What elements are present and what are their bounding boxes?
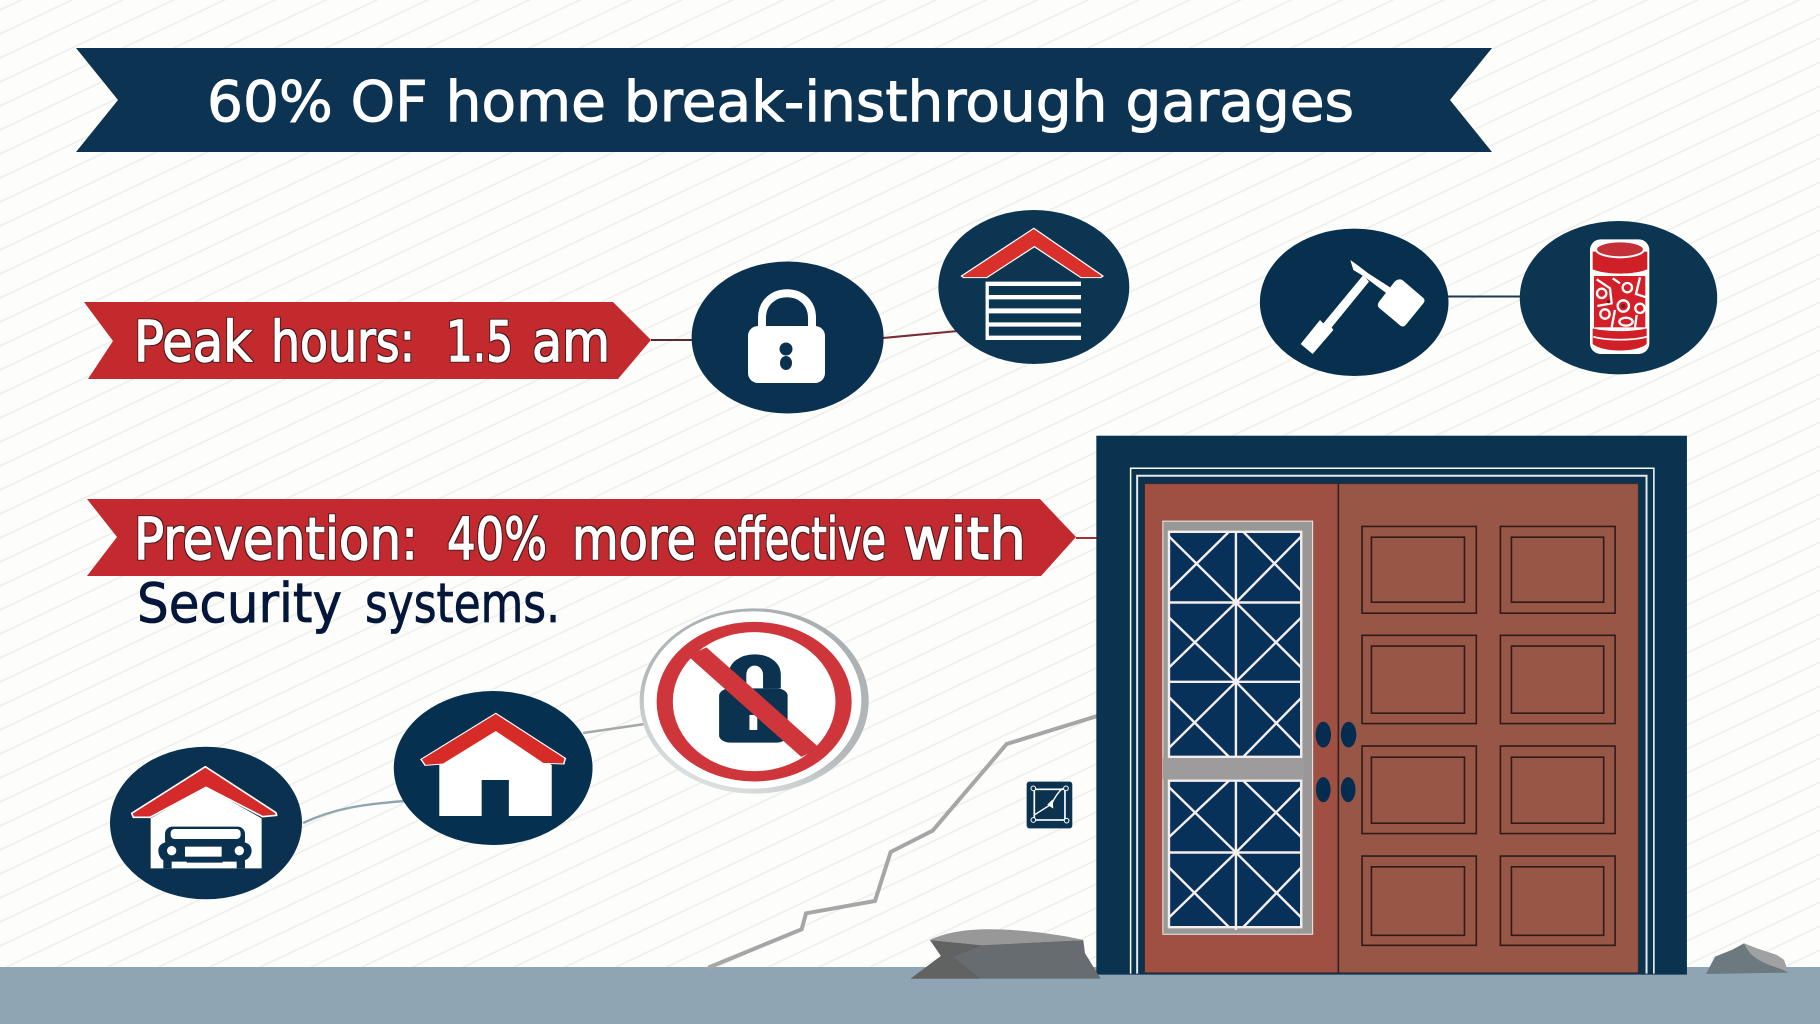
icon: garage circle [938,210,1129,364]
ribbon: peak hours: hours: [271,310,415,375]
text: security systems: Security [137,572,342,635]
ground [0,967,1820,1024]
door knobs [1316,722,1356,802]
ribbon: prevention: 40% [447,505,547,573]
icon: car garage circle [110,747,302,899]
connector: car to house [303,801,405,823]
ribbon: peak hours: 1.5 [446,310,513,375]
icon: hammer tool circle [1260,229,1448,376]
ribbon: prevention [87,499,1076,576]
connector: tool to can [1448,296,1520,298]
icon: small security sensor [1027,782,1072,828]
door frame [1096,436,1687,975]
ribbon: peak hours: Peak [134,310,252,375]
text: security systems: systems. [365,572,560,635]
crack line [708,716,1097,968]
window [1163,521,1313,934]
icon: padlock circle [692,262,884,414]
rock: left [911,929,1101,979]
icon: prohibited lock sign [640,608,869,794]
door panel [1144,484,1638,973]
title banner [76,48,1492,152]
title banner: 60% OF home break-insthrough garages [207,70,1354,135]
icon: house circle [394,691,593,845]
door [1096,436,1687,975]
ribbon: prevention: more [572,505,696,573]
ribbon: peak hours [84,302,651,379]
door panels [1362,526,1615,945]
rock: right [1706,943,1788,974]
ribbon: prevention: effective [713,505,886,573]
ribbon: peak hours: am [532,310,610,375]
connector: ribbon to door [1076,537,1098,539]
ribbon: prevention: Prevention: [134,505,418,573]
connector: house to no-lock [583,724,645,733]
icon: can circle [1520,221,1717,374]
text: security systems [137,572,560,635]
ribbon: prevention: with [903,505,1026,573]
frame trim lines [1131,468,1654,974]
connector: ribbon to lock [651,339,693,341]
connector: lock to garage [883,331,958,338]
